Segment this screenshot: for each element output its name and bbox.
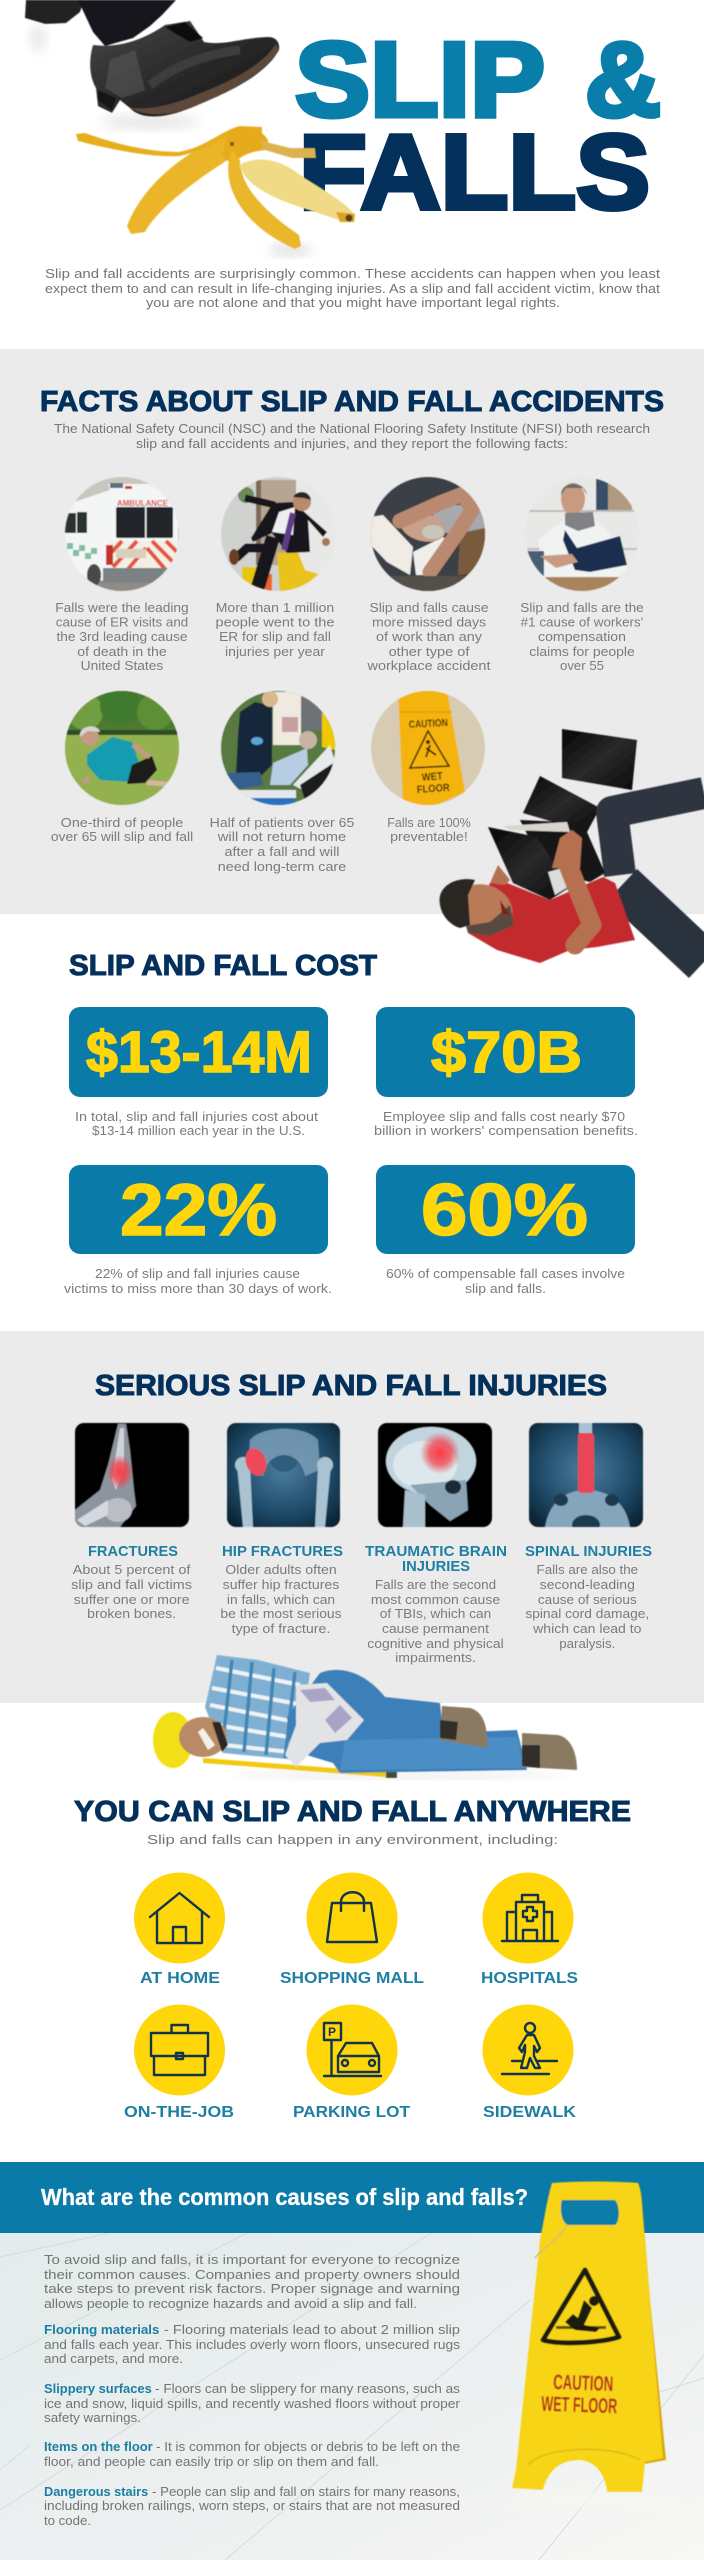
injury text: fractures: slip and fall victims bbox=[71, 1578, 192, 1592]
cause: dangerous stairs: - People can slip and fall on stairs for many reasons, bbox=[152, 2485, 460, 2499]
fact text: half of patients: after a fall and will bbox=[224, 845, 340, 859]
stat box: $13-14M bbox=[69, 1007, 328, 1097]
location: sidewalk bbox=[482, 2004, 576, 2121]
fact text: missed work: Slip and falls cause bbox=[370, 601, 488, 615]
cause: flooring materials: and carpets, and more. bbox=[44, 2352, 183, 2366]
stat caption: total cost: In total, slip and fall injuries cost about bbox=[75, 1110, 319, 1124]
photo: injured worker with neck brace bbox=[525, 477, 639, 593]
injury text: spinal injuries: which can lead to bbox=[532, 1622, 641, 1636]
causes intro text: To avoid slip and falls, it is important for everyone to recognize bbox=[44, 2253, 460, 2267]
fact text: one-third: One-third of people bbox=[61, 816, 183, 830]
injury text: fractures: About 5 percent of bbox=[73, 1563, 191, 1577]
stat caption: employee cost: Employee slip and falls cost nearly $70 bbox=[383, 1110, 625, 1124]
photo: yellow caution wet floor sign bbox=[510, 2182, 670, 2508]
cause: slippery surfaces bbox=[44, 2382, 460, 2425]
panel: slip and fall cost bbox=[0, 914, 704, 1331]
injury text: traumatic brain injuries: cognitive and physical bbox=[367, 1637, 504, 1651]
causes intro text: allows people to recognize hazards and avoid a slip and fall. bbox=[44, 2297, 417, 2311]
x-ray: spine bbox=[529, 1423, 643, 1535]
heading: anywhere: YOU CAN SLIP AND FALL ANYWHERE bbox=[74, 1796, 631, 1828]
fact text: leading cause: cause of ER visits and bbox=[56, 616, 188, 630]
location: parking lot: P bbox=[328, 2025, 336, 2039]
cause: items on the floor: Items on the floor bbox=[44, 2440, 153, 2454]
facts intro text: slip and fall accidents and injuries, and they report the following facts: bbox=[136, 437, 568, 451]
injury text: hip fractures: be the most serious bbox=[220, 1607, 342, 1621]
facts intro text bbox=[54, 422, 650, 451]
heading: causes: What are the common causes of slip and falls? bbox=[41, 2184, 528, 2210]
injury text: fractures: suffer one or more bbox=[74, 1593, 190, 1607]
fact text: workers compensation: claims for people bbox=[529, 645, 635, 659]
stat box: 22% bbox=[69, 1165, 328, 1254]
stat box: 22%: 22% bbox=[120, 1170, 277, 1251]
fact text: leading cause bbox=[55, 601, 189, 673]
fact text: half of patients: Half of patients over 65 bbox=[210, 816, 354, 830]
stat caption: 60 percent bbox=[386, 1267, 625, 1296]
fact text: workers compensation: #1 cause of workers' bbox=[521, 616, 643, 630]
injury text: fractures: FRACTURES bbox=[88, 1543, 178, 1560]
fact text: leading cause: the 3rd leading cause bbox=[56, 630, 188, 644]
stat box: 60%: 60% bbox=[421, 1170, 588, 1251]
fact text: preventable bbox=[387, 816, 471, 844]
injury text: hip fractures: suffer hip fractures bbox=[223, 1578, 339, 1592]
sign figure bbox=[556, 2296, 606, 2332]
injury text: hip fractures: type of fracture. bbox=[232, 1622, 330, 1636]
injury text: spinal injuries: cause of serious bbox=[538, 1593, 637, 1607]
x-ray: foot fracture bbox=[75, 1423, 189, 1527]
injury text: traumatic brain injuries: of TBIs, which can bbox=[380, 1607, 491, 1621]
injury text: hip fractures: Older adults often bbox=[225, 1563, 337, 1577]
cause: flooring materials: Flooring materials bbox=[44, 2323, 159, 2337]
cause: flooring materials: - Flooring materials lead to about 2 million slip bbox=[164, 2323, 460, 2337]
stat caption: 22 percent bbox=[64, 1267, 332, 1296]
location: parking lot: PARKING LOT bbox=[293, 2104, 410, 2121]
injury text: hip fractures: in falls, which can bbox=[227, 1593, 335, 1607]
photo: man lying in bed bbox=[371, 477, 485, 592]
causes intro text: take steps to prevent risk factors. Proper signage and warning bbox=[44, 2282, 460, 2296]
injury text: hip fractures bbox=[220, 1543, 343, 1636]
cause: dangerous stairs bbox=[44, 2485, 460, 2528]
location: at home: AT HOME bbox=[140, 1970, 220, 1987]
causes intro text: their common causes. Companies and property owners should bbox=[44, 2268, 460, 2282]
cause: flooring materials: and falls each year. This includes overly worn floors, unsecured rugs bbox=[44, 2338, 460, 2352]
location: at home bbox=[134, 1872, 225, 1987]
location: shopping mall bbox=[280, 1872, 424, 1987]
stat box: 60% bbox=[376, 1165, 635, 1254]
injury text: spinal injuries: SPINAL INJURIES bbox=[525, 1543, 652, 1560]
stat box: $13-14M: $13-14M bbox=[86, 1020, 312, 1085]
fact text: workers compensation: over 55 bbox=[560, 659, 604, 673]
panel: facts about slip and fall accidents bbox=[0, 349, 704, 914]
intro text bbox=[45, 267, 661, 310]
photo: man falling with binders bbox=[440, 729, 704, 963]
location: hospitals bbox=[481, 1872, 578, 1987]
fact text: 1 million ER visits: ER for slip and fall bbox=[219, 630, 331, 644]
cause: dangerous stairs: including broken railings, worn steps, or stairs that are not measured bbox=[44, 2499, 460, 2513]
cause: dangerous stairs: Dangerous stairs bbox=[44, 2485, 148, 2499]
panel: common causes bbox=[0, 2162, 704, 2560]
title: SLIP bbox=[295, 21, 545, 139]
fact text: leading cause: of death in the bbox=[77, 645, 167, 659]
stat box: $70B bbox=[376, 1007, 635, 1097]
x-ray: hip fracture bbox=[227, 1423, 340, 1527]
injury text: traumatic brain injuries: TRAUMATIC BRAIN bbox=[365, 1543, 507, 1560]
fact text: workers compensation bbox=[520, 601, 644, 673]
stat caption: 60 percent: 60% of compensable fall cases involve bbox=[386, 1267, 625, 1281]
injury text: fractures bbox=[71, 1543, 192, 1621]
photo: caution wet floor sign: CAUTION bbox=[409, 717, 448, 731]
fact text: one-third bbox=[51, 816, 193, 844]
cause: slippery surfaces: - Floors can be slippery for many reasons, such as bbox=[155, 2382, 460, 2396]
sign text: CAUTION bbox=[553, 2371, 614, 2396]
location: on the job: ON-THE-JOB bbox=[124, 2104, 234, 2121]
location: hospitals: HOSPITALS bbox=[481, 1970, 578, 1987]
photo: man slipping on wet floor bbox=[220, 477, 336, 592]
heading: facts: FACTS ABOUT SLIP AND FALL ACCIDENTS bbox=[40, 386, 664, 418]
cause: slippery surfaces: Slippery surfaces bbox=[44, 2382, 152, 2396]
heading: injuries: SERIOUS SLIP AND FALL INJURIES bbox=[95, 1370, 607, 1402]
injury text: hip fractures: HIP FRACTURES bbox=[222, 1543, 343, 1560]
fact text: 1 million ER visits: injuries per year bbox=[225, 645, 325, 659]
fact text: half of patients: will not return home bbox=[217, 830, 346, 844]
fact text: leading cause: United States bbox=[81, 659, 163, 673]
x-ray: skull bbox=[378, 1423, 492, 1527]
photo: worker lying on floor bbox=[153, 1655, 577, 1778]
photo: caution wet floor sign: FLOOR bbox=[416, 782, 451, 796]
injury text: traumatic brain injuries: impairments. bbox=[395, 1651, 476, 1665]
fact text: missed work: of work than any bbox=[376, 630, 483, 644]
cause: slippery surfaces: safety warnings. bbox=[44, 2411, 141, 2425]
fact text: 1 million ER visits bbox=[216, 601, 334, 659]
injury text: spinal injuries: spinal cord damage, bbox=[525, 1607, 649, 1621]
fact text: preventable: Falls are 100% bbox=[387, 816, 471, 830]
stat caption: employee cost: billion in workers' compensation benefits. bbox=[374, 1124, 638, 1138]
location: parking lot bbox=[293, 2004, 410, 2121]
cause: slippery surfaces: ice and snow, liquid spills, and recently washed floors without proper bbox=[44, 2397, 460, 2411]
photo: shoe stepping on banana bbox=[25, 0, 279, 128]
panel: serious injuries bbox=[0, 1331, 704, 1703]
stat caption: employee cost bbox=[374, 1110, 638, 1138]
title: FALLS bbox=[299, 114, 650, 232]
location: shopping mall: SHOPPING MALL bbox=[280, 1970, 424, 1987]
fact text: missed work: other type of bbox=[389, 645, 470, 659]
fact text: half of patients bbox=[210, 816, 354, 874]
photo: banana peel bbox=[76, 126, 355, 255]
title: & bbox=[585, 21, 661, 139]
injury text: traumatic brain injuries: INJURIES bbox=[402, 1558, 470, 1575]
fact text: half of patients: need long-term care bbox=[218, 860, 346, 874]
fact text: workers compensation: Slip and falls are the bbox=[520, 601, 644, 615]
header band bbox=[0, 2162, 704, 2233]
heading: cost: SLIP AND FALL COST bbox=[69, 950, 378, 982]
fact text: workers compensation: compensation bbox=[538, 630, 626, 644]
injury text: spinal injuries: Falls are also the bbox=[537, 1563, 638, 1577]
photo: ambulance bbox=[65, 477, 179, 591]
cause: items on the floor: floor, and people can easily trip or slip on them and fall. bbox=[44, 2455, 379, 2469]
title bbox=[295, 21, 661, 232]
causes intro text bbox=[44, 2253, 460, 2311]
fact text: leading cause: Falls were the leading bbox=[55, 601, 189, 615]
intro text: Slip and fall accidents are surprisingly common. These accidents can happen when you least bbox=[45, 267, 661, 281]
fact text: one-third: over 65 will slip and fall bbox=[51, 830, 193, 844]
photo: nurse with elderly patient bbox=[220, 691, 335, 806]
fact text: 1 million ER visits: people went to the bbox=[216, 616, 334, 630]
panel: hero bbox=[0, 0, 704, 349]
injury text: traumatic brain injuries: Falls are the second bbox=[375, 1578, 496, 1592]
sign text bbox=[541, 2371, 618, 2418]
cause: dangerous stairs: to code. bbox=[44, 2514, 91, 2528]
fact text: missed work: workplace accident bbox=[366, 659, 491, 673]
sign text: WET FLOOR bbox=[541, 2393, 618, 2418]
injury text: spinal injuries bbox=[525, 1543, 652, 1651]
cause: items on the floor: - It is common for objects or debris to be left on the bbox=[156, 2440, 460, 2454]
photo: ambulance: AMBULANCE bbox=[117, 498, 168, 508]
panel: you can slip and fall anywhere bbox=[0, 1703, 704, 2162]
injury text: spinal injuries: second-leading bbox=[540, 1578, 635, 1592]
photo: caution wet floor sign: WET bbox=[421, 770, 444, 784]
photo: older woman fallen in park bbox=[65, 685, 179, 805]
fact text: 1 million ER visits: More than 1 million bbox=[216, 601, 334, 615]
intro text: expect them to and can result in life-changing injuries. As a slip and fall accident victim, know that bbox=[45, 282, 661, 296]
injury text: spinal injuries: paralysis. bbox=[559, 1637, 615, 1651]
fact text: missed work: more missed days bbox=[372, 616, 486, 630]
stat caption: 60 percent: slip and falls. bbox=[465, 1282, 546, 1296]
injury text: traumatic brain injuries bbox=[365, 1543, 507, 1665]
stat caption: total cost: $13-14 million each year in the U.S. bbox=[92, 1124, 305, 1138]
stat box: $70B: $70B bbox=[431, 1020, 582, 1085]
stat caption: 22 percent: victims to miss more than 30 days of work. bbox=[64, 1282, 332, 1296]
stat caption: total cost bbox=[75, 1110, 319, 1138]
location: sidewalk: SIDEWALK bbox=[483, 2104, 576, 2121]
floor background bbox=[0, 2233, 704, 2560]
injury text: traumatic brain injuries: cause permanent bbox=[382, 1622, 489, 1636]
intro text: you are not alone and that you might have important legal rights. bbox=[146, 296, 560, 310]
location: on the job bbox=[124, 2004, 234, 2121]
fact text: preventable: preventable! bbox=[390, 830, 468, 844]
injury text: traumatic brain injuries: most common cause bbox=[371, 1593, 500, 1607]
facts intro text: The National Safety Council (NSC) and the National Flooring Safety Institute (NFSI) both research bbox=[54, 422, 650, 436]
anywhere subtitle: Slip and falls can happen in any environment, including: bbox=[147, 1833, 558, 1847]
stat caption: 22 percent: 22% of slip and fall injuries cause bbox=[95, 1267, 300, 1281]
injury text: fractures: broken bones. bbox=[87, 1607, 176, 1621]
cause: flooring materials bbox=[44, 2323, 460, 2366]
cause: items on the floor bbox=[44, 2440, 460, 2469]
photo: caution wet floor sign bbox=[371, 690, 485, 805]
fact text: missed work bbox=[366, 601, 491, 673]
